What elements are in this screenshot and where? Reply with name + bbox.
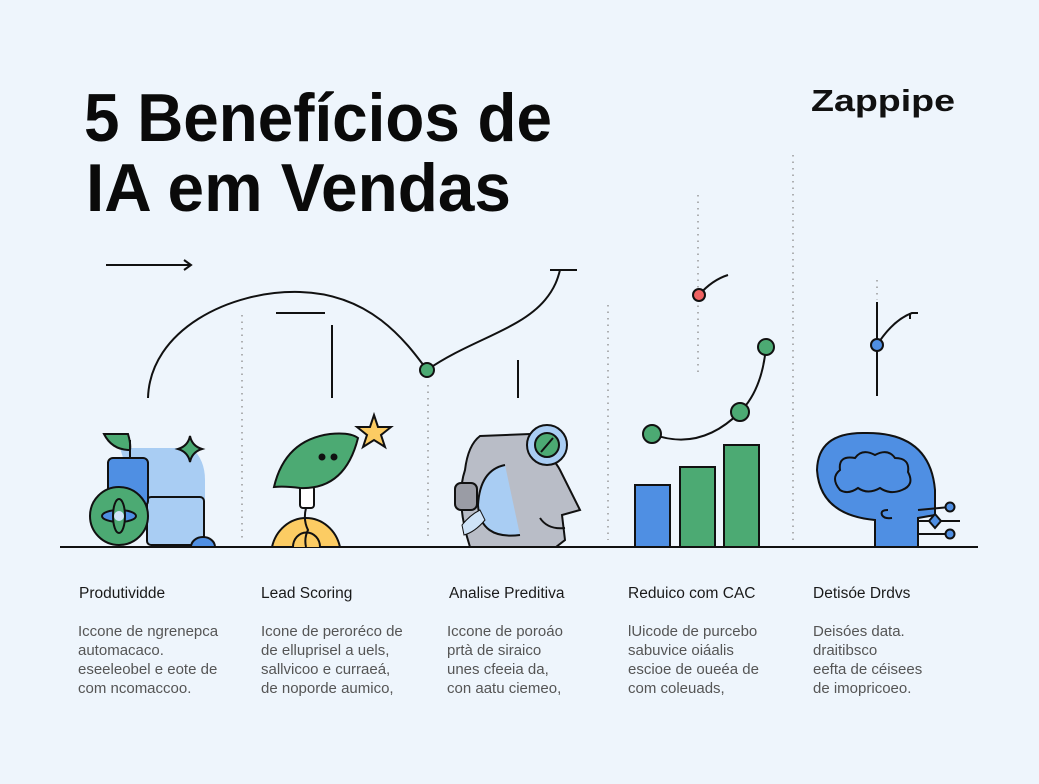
title: 5 Benefícios de: [84, 80, 552, 156]
icon: productivity: [90, 434, 215, 547]
title: [84, 80, 552, 226]
text: escioe de oueéa de: [628, 661, 759, 678]
text: de elluprisel a uels,: [261, 642, 389, 659]
icon: predictive analysis: [455, 425, 580, 547]
logo: Zappipe: Zappipe: [811, 83, 955, 118]
column texts: Reduico com CAC: [628, 585, 756, 602]
text: Deisóes data.: [813, 623, 905, 640]
text: de imopricoeo.: [813, 680, 911, 697]
icon: data-driven decisions head: [817, 302, 960, 547]
column texts: Produtividde: [79, 585, 165, 602]
column texts: Analise Preditiva: [449, 585, 565, 602]
text: draitibsco: [813, 642, 877, 659]
icon: CAC reduction chart: [635, 275, 774, 547]
column texts: Detisóe Drdvs: [813, 585, 911, 602]
column texts: Lead Scoring: [261, 585, 352, 602]
text: prtà de siraico: [447, 642, 541, 659]
text: eseeleobel e eote de: [78, 661, 217, 678]
text: Iccone de poroáo: [447, 623, 563, 640]
text: sallvicoo e curraeá,: [261, 661, 390, 678]
text: de noporde aumico,: [261, 680, 394, 697]
icon: lead scoring: [272, 415, 391, 547]
text: automacaco.: [78, 642, 164, 659]
column texts: [79, 585, 911, 602]
text: eefta de céisees: [813, 661, 922, 678]
baseline: [60, 546, 978, 548]
text: sabuvice oiáalis: [628, 642, 734, 659]
text: Icone de peroréco de: [261, 623, 403, 640]
text: lUicode de purcebo: [628, 623, 757, 640]
text: con aatu ciemeo,: [447, 680, 561, 697]
text: Iccone de ngrenepca: [78, 623, 219, 640]
arrow: [106, 260, 191, 270]
connecting curve: [148, 270, 577, 398]
text: com ncomaccoo.: [78, 680, 191, 697]
title: IA em Vendas: [86, 150, 511, 226]
text: com coleuads,: [628, 680, 725, 697]
text: unes cfeeia da,: [447, 661, 549, 678]
